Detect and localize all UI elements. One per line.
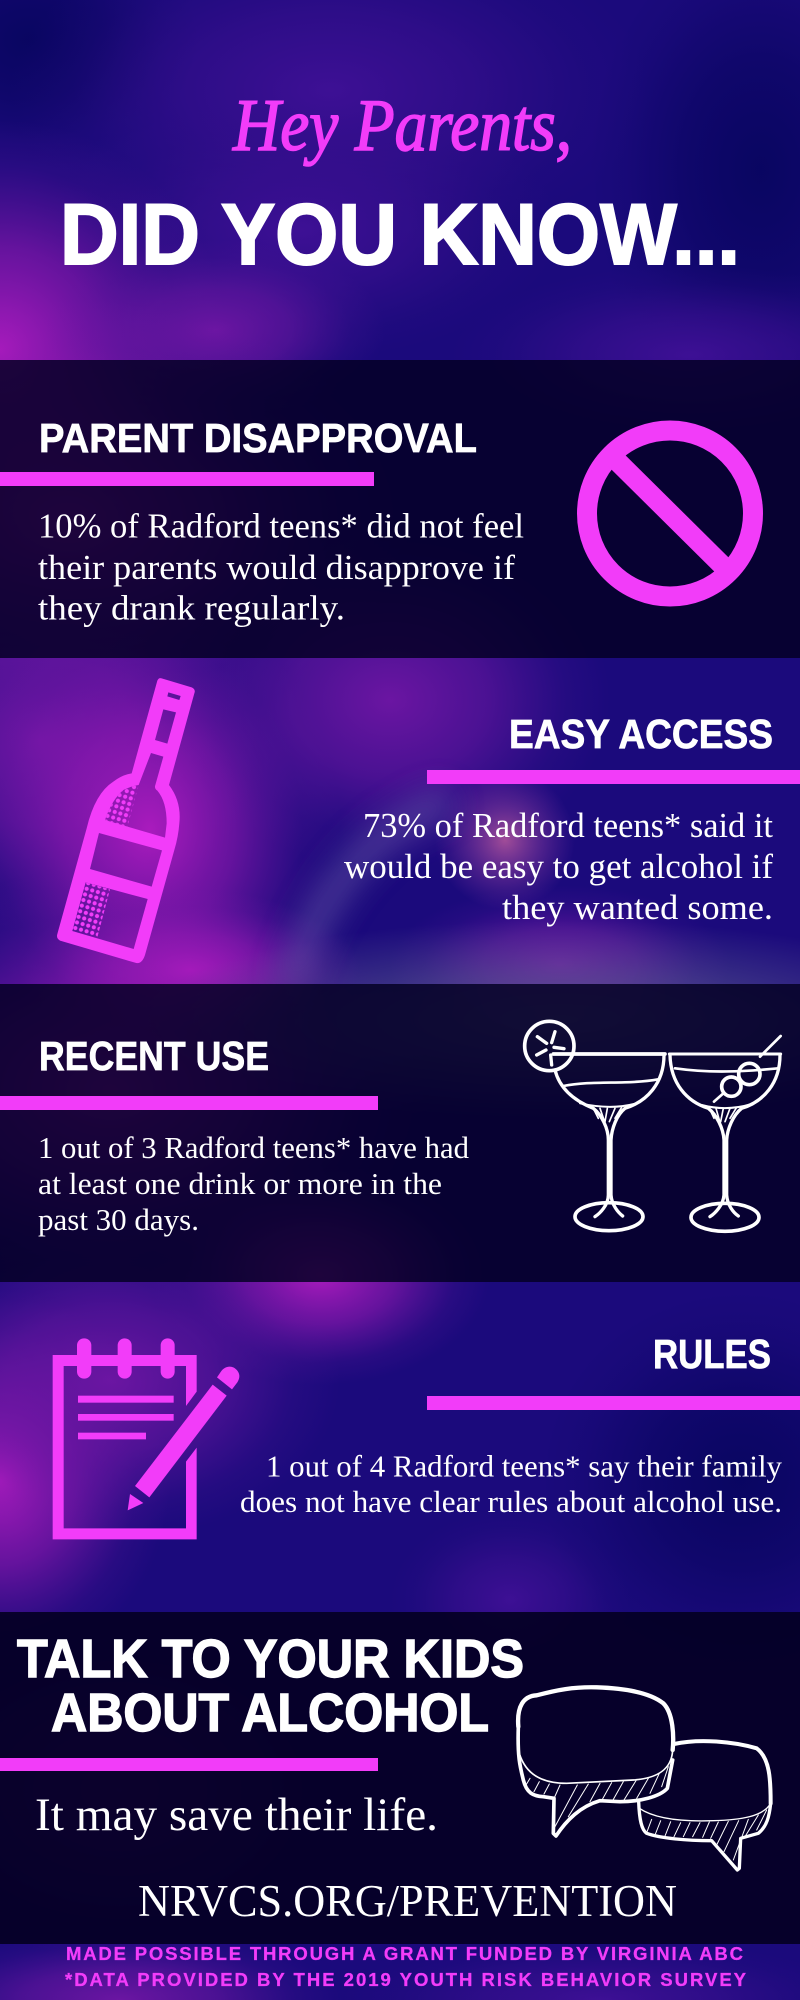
footer credits: *DATA PROVIDED BY THE 2019 YOUTH RISK BEHAVIOR SURVEY bbox=[65, 1969, 747, 1990]
panel: parent disapproval bbox=[0, 360, 800, 658]
body text bbox=[38, 1130, 469, 1237]
heading: parent disapproval: PARENT DISAPPROVAL bbox=[39, 415, 477, 461]
tagline: It may save their life. bbox=[35, 1789, 438, 1841]
script heading: Hey Parents,: Hey Parents, bbox=[232, 85, 572, 167]
icon: speech bubbles bbox=[518, 1687, 771, 1870]
panel: rules bbox=[53, 1331, 800, 1539]
panel: easy access bbox=[57, 678, 800, 963]
panel: talk to your kids bbox=[0, 1612, 800, 1944]
body text: 1 out of 3 Radford teens* have had bbox=[38, 1130, 469, 1165]
body text bbox=[38, 506, 524, 628]
heading: easy access: EASY ACCESS bbox=[509, 711, 773, 757]
footer credits: MADE POSSIBLE THROUGH A GRANT FUNDED BY VIRGINIA ABC bbox=[66, 1943, 743, 1964]
heading: rules: RULES bbox=[653, 1331, 771, 1377]
panel: recent use bbox=[0, 984, 800, 1282]
website address: NRVCS.ORG/PREVENTION bbox=[138, 1876, 677, 1926]
heading: talk to your kids about alcohol bbox=[17, 1629, 524, 1743]
body text: does not have clear rules about alcohol use. bbox=[240, 1484, 782, 1519]
body text bbox=[344, 806, 773, 927]
icon: two cocktail glasses bbox=[525, 1021, 781, 1231]
footer credits bbox=[65, 1943, 747, 1990]
heading: recent use: RECENT USE bbox=[39, 1033, 269, 1079]
band: top header bbox=[60, 85, 740, 283]
divider bar bbox=[0, 1096, 378, 1110]
heading: talk to your kids about alcohol: TALK TO YOUR KIDS bbox=[17, 1629, 524, 1689]
icon: notepad and pencil bbox=[53, 1338, 239, 1539]
body text: they drank regularly. bbox=[38, 588, 345, 628]
divider bar bbox=[0, 1758, 378, 1771]
body text: 10% of Radford teens* did not feel bbox=[38, 506, 524, 546]
body text: past 30 days. bbox=[38, 1202, 199, 1237]
body text: 1 out of 4 Radford teens* say their family bbox=[266, 1448, 782, 1484]
main title: DID YOU KNOW... bbox=[60, 187, 740, 283]
body text: they wanted some. bbox=[502, 888, 773, 927]
heading: talk to your kids about alcohol: ABOUT ALCOHOL bbox=[51, 1683, 489, 1743]
body text bbox=[240, 1448, 782, 1519]
body text: their parents would disapprove if bbox=[38, 548, 515, 587]
divider bar bbox=[427, 1396, 800, 1410]
divider bar bbox=[427, 770, 800, 784]
icon: prohibition sign bbox=[587, 430, 753, 596]
icon: wine bottle bbox=[57, 678, 195, 963]
body text: would be easy to get alcohol if bbox=[344, 847, 773, 886]
body text: 73% of Radford teens* said it bbox=[363, 806, 773, 845]
body text: at least one drink or more in the bbox=[38, 1166, 442, 1201]
divider bar bbox=[0, 472, 374, 486]
